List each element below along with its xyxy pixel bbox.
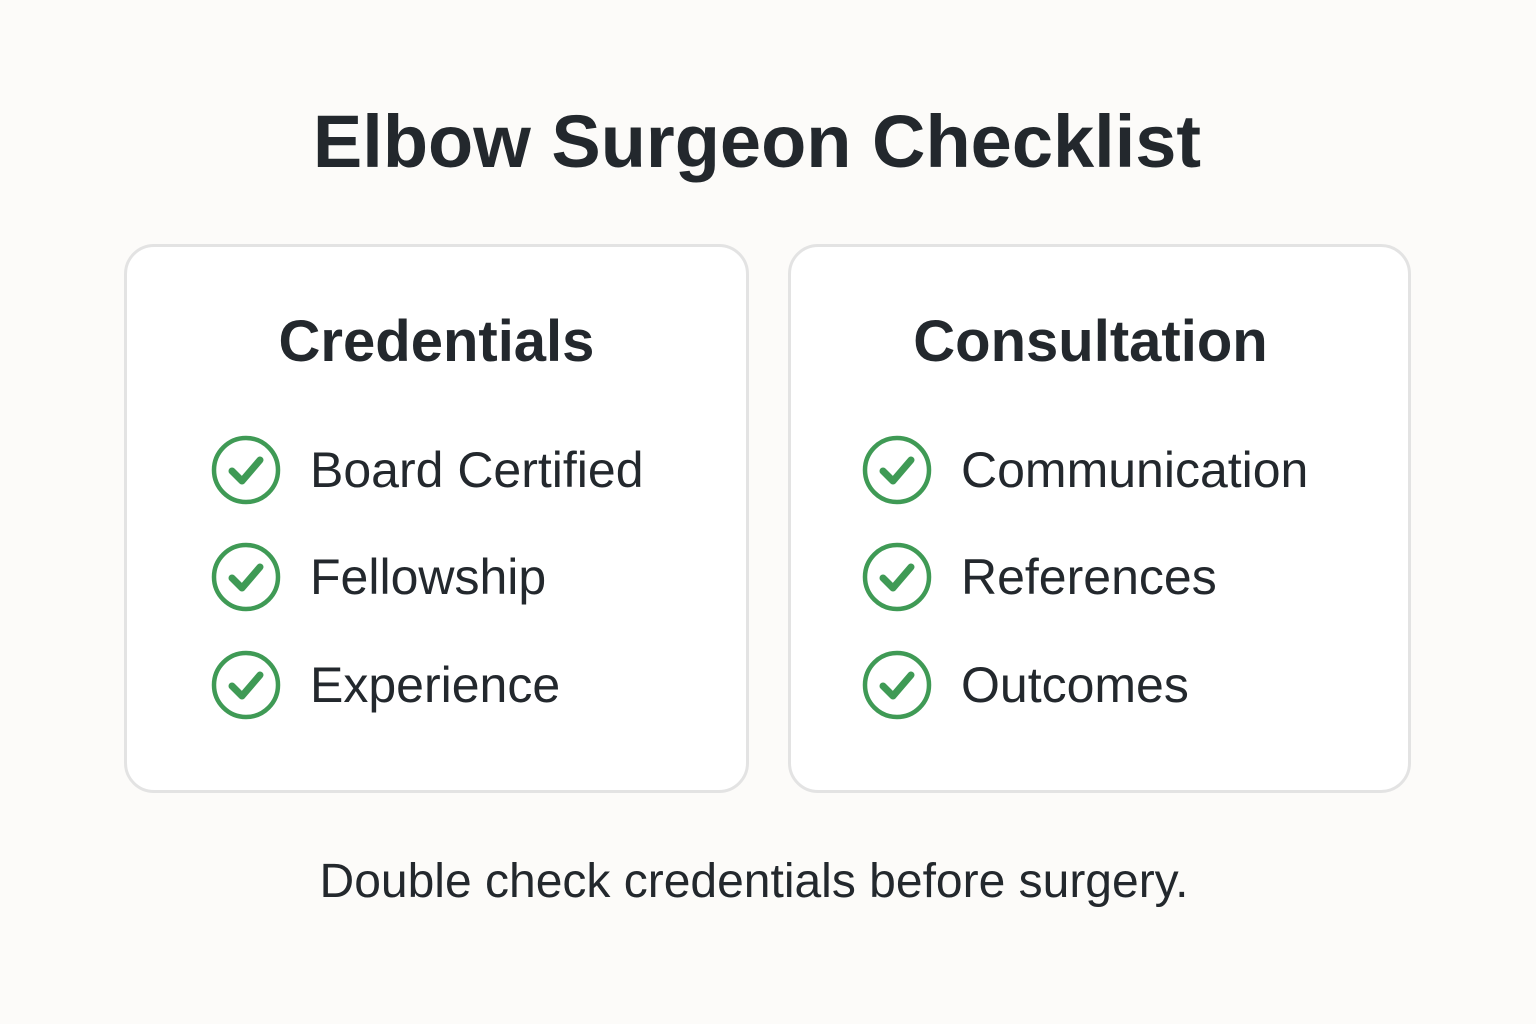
- item: outcomes: Outcomes: [961, 657, 1189, 713]
- heading: credentials: Credentials: [279, 309, 594, 374]
- item: communication: Communication: [961, 442, 1308, 498]
- panel: credentials: [124, 244, 749, 793]
- item: board certified: [212, 436, 644, 504]
- item: communication: [862, 436, 1308, 504]
- title: Elbow Surgeon Checklist: [313, 100, 1201, 183]
- item: experience: Experience: [310, 657, 560, 713]
- footer note: Double check credentials before surgery.: [320, 855, 1188, 908]
- item: references: [862, 542, 1217, 612]
- item: fellowship: [212, 542, 546, 612]
- panel: consultation: [788, 244, 1411, 793]
- item: fellowship: Fellowship: [310, 549, 546, 605]
- item: outcomes: [862, 650, 1189, 720]
- item: experience: [212, 650, 560, 720]
- item: references: References: [961, 549, 1217, 605]
- item: board certified: Board Certified: [310, 442, 644, 498]
- heading: consultation: Consultation: [913, 309, 1268, 374]
